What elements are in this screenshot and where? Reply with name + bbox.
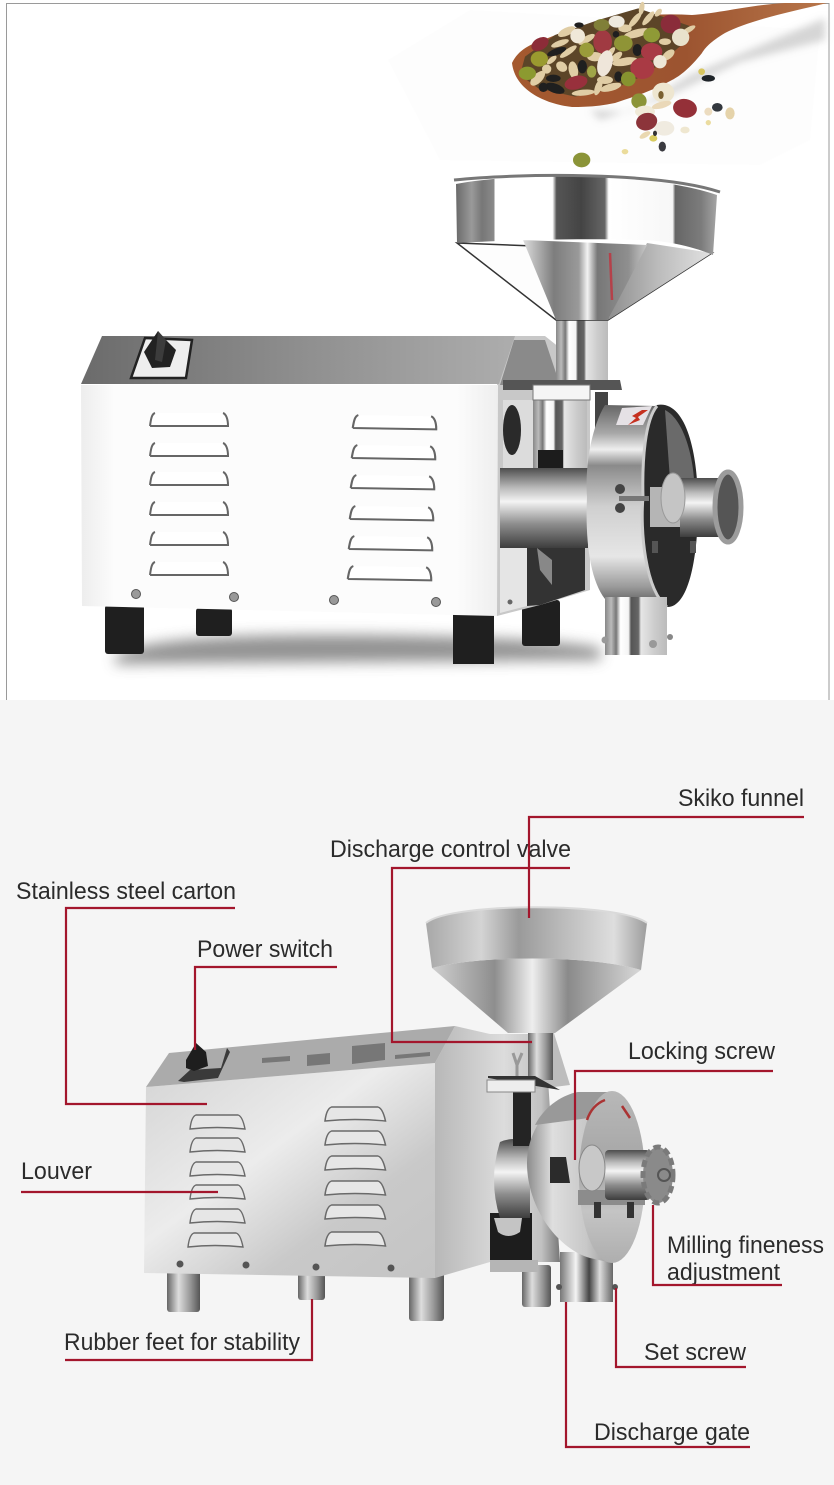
funnel cylinder xyxy=(456,176,717,255)
label: Set screw: Set screw xyxy=(644,1339,747,1366)
spilled grains xyxy=(573,68,735,167)
label: Discharge control valve xyxy=(330,836,571,1042)
funnel rim xyxy=(454,175,720,192)
illustration: bottom grinder machine xyxy=(144,907,673,1321)
label: Locking screw xyxy=(575,1038,776,1160)
neck and clamp xyxy=(487,1030,570,1092)
label: Rubber feet for stability: Rubber feet for stability xyxy=(64,1329,300,1356)
label: Rubber feet for stability xyxy=(64,1299,312,1360)
ground shadow xyxy=(115,635,600,664)
label: Louver: Louver xyxy=(21,1158,92,1185)
funnel cone xyxy=(432,958,641,1033)
legs xyxy=(167,1265,551,1321)
top face xyxy=(81,336,515,384)
label: Discharge gate: Discharge gate xyxy=(594,1419,750,1446)
label: Stainless steel carton: Stainless steel carton xyxy=(16,878,236,905)
label: Power switch xyxy=(195,936,337,1050)
grinder housing xyxy=(527,1091,645,1263)
label: Discharge gate xyxy=(566,1302,750,1447)
label: Stainless steel carton xyxy=(16,878,236,1104)
louvers right xyxy=(348,415,436,580)
label: Power switch: Power switch xyxy=(197,936,333,963)
side panel xyxy=(435,1026,560,1278)
label: Set screw xyxy=(616,1288,747,1367)
funnel cone xyxy=(457,240,712,320)
panel: labelled diagram background xyxy=(0,700,834,1485)
rubber feet xyxy=(105,600,560,664)
label: Skiko funnel: Skiko funnel xyxy=(678,785,804,812)
louvers left xyxy=(188,1115,245,1247)
label: Milling fineness adjustment: adjustment xyxy=(667,1259,780,1286)
funnel rim edge xyxy=(426,907,647,923)
label: Locking screw: Locking screw xyxy=(628,1038,776,1065)
louvers right xyxy=(325,1107,386,1246)
power switch xyxy=(178,1043,230,1082)
grain bed xyxy=(520,8,692,97)
fineness adjuster handle xyxy=(550,1145,673,1218)
control plate text blocks xyxy=(262,1043,430,1066)
neck and clamp xyxy=(503,320,622,432)
spoon shadow xyxy=(590,18,825,120)
top face xyxy=(146,1026,455,1087)
spoon body xyxy=(512,3,827,107)
label: Milling fineness adjustment xyxy=(653,1205,824,1286)
panel: product photo background xyxy=(0,0,834,700)
panel screws xyxy=(132,590,440,606)
illustration: top grinder machine xyxy=(81,175,741,664)
fineness adjuster handle xyxy=(615,472,741,553)
label: Milling fineness adjustment: Milling fineness xyxy=(667,1232,824,1259)
drive section xyxy=(490,1090,538,1272)
panel screws xyxy=(176,1260,394,1272)
side chrome section xyxy=(497,336,590,616)
discharge pipe xyxy=(556,1252,618,1302)
discharge pipe xyxy=(602,597,673,655)
funnel cylinder with rim xyxy=(426,907,647,970)
grinder housing xyxy=(587,405,698,607)
power switch xyxy=(131,331,192,378)
front panel xyxy=(144,1063,435,1278)
label: Skiko funnel xyxy=(529,785,804,918)
louvers left xyxy=(150,413,228,575)
label: Discharge control valve: Discharge control valve xyxy=(330,836,571,863)
front panel xyxy=(81,385,498,616)
illustration: wooden spoon with grains xyxy=(512,1,827,167)
